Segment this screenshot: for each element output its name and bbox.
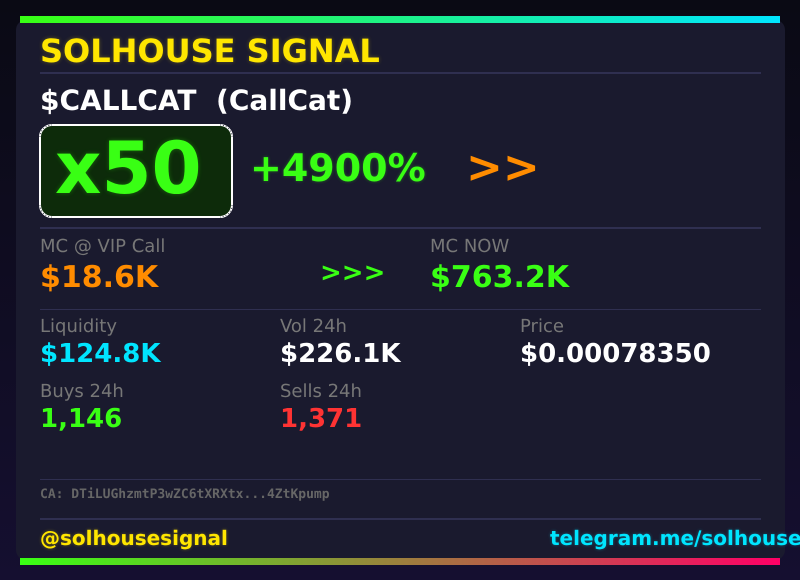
label: Buys 24h [40,381,124,402]
multiplier value: x50 [55,126,202,210]
value: $18.6K [40,260,158,295]
value: 1,146 [40,404,122,434]
handle: @solhousesignal [40,526,228,550]
label: Vol 24h [280,316,347,337]
label: Sells 24h [280,381,362,402]
price stat [520,316,711,369]
telegram link: telegram.me/solhouse [550,526,800,550]
token name: $CALLCAT (CallCat) [40,84,353,117]
volume stat [280,316,402,369]
value: $763.2K [430,260,569,295]
contract address: CA: DTiLUGhzmtP3wZC6tXRXtx...4ZtKpump [40,487,330,502]
title: SOLHOUSE SIGNAL [40,32,380,70]
multiplier badge [39,124,233,218]
value: $0.00078350 [520,339,711,369]
green arrows: >>> [320,258,385,288]
value: $124.8K [40,339,160,369]
orange arrows: >> [466,142,540,193]
value: $226.1K [280,339,400,369]
buys stat [40,381,124,434]
liquidity stat [40,316,162,369]
label: MC NOW [430,236,509,257]
MC now [430,236,570,295]
percent gain: +4900% [250,146,426,190]
top gradient bar [20,16,780,23]
label: Price [520,316,564,337]
sells stat [280,381,362,434]
label: MC @ VIP Call [40,236,165,257]
bottom gradient bar [20,558,780,565]
value: 1,371 [280,404,362,434]
badge outline [39,124,233,218]
label: Liquidity [40,316,117,337]
MC at VIP call [40,236,165,295]
